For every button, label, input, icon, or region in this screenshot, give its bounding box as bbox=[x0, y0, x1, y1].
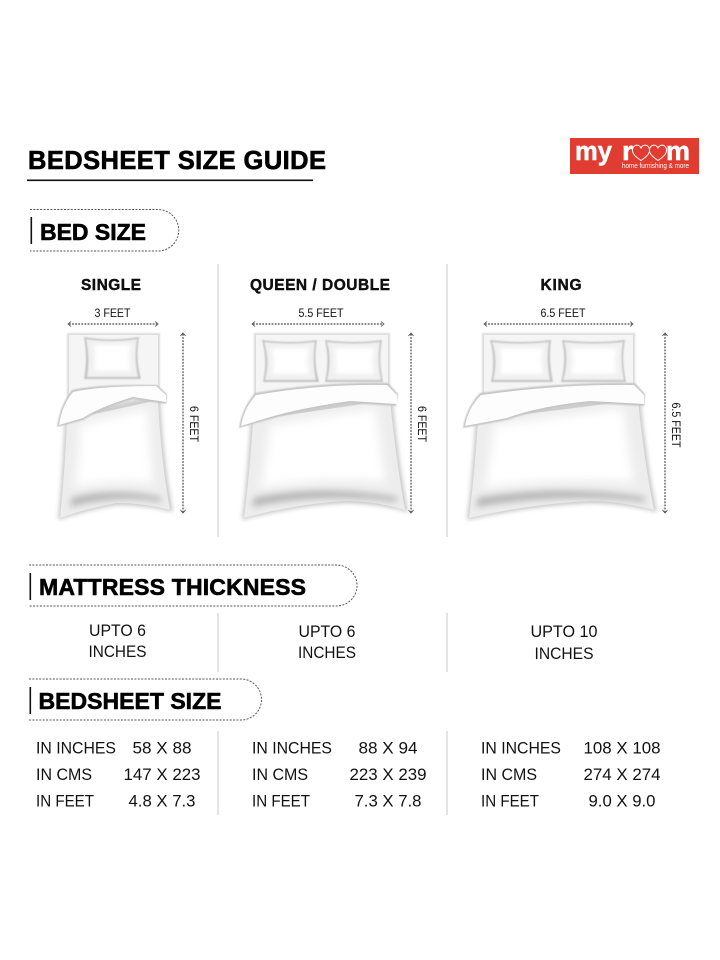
height dimension: 6.5 feet: 6.5 FEET bbox=[669, 402, 683, 448]
sizes: queen bbox=[252, 738, 426, 810]
bed: single bbox=[57, 333, 173, 520]
sizes: queen: 88 X 94 bbox=[358, 738, 418, 758]
sizes: queen: IN CMS bbox=[252, 765, 308, 784]
label: king: KING bbox=[540, 277, 582, 294]
sizes: king: IN INCHES bbox=[481, 738, 561, 758]
mattress: king: UPTO 10 bbox=[530, 622, 598, 641]
sizes: king: 274 X 274 bbox=[584, 765, 660, 784]
label: queen / double: QUEEN / DOUBLE bbox=[250, 277, 390, 294]
sizes: king: IN CMS bbox=[481, 765, 537, 784]
sizes: queen: IN INCHES bbox=[252, 738, 332, 758]
height dimension: 6 feet: 6 FEET bbox=[187, 406, 201, 443]
bed: king bbox=[463, 333, 657, 520]
width dimension: 5.5 feet: 5.5 FEET bbox=[298, 306, 344, 320]
sizes: single: 58 X 88 bbox=[132, 738, 192, 758]
height dimension: 6 feet queen: 6 FEET bbox=[415, 406, 429, 443]
sizes: single: IN CMS bbox=[36, 765, 92, 784]
column dividers: mattress bbox=[218, 613, 447, 672]
height dimension: 6 feet queen bbox=[408, 333, 429, 513]
width dimension: 6.5 feet: 6.5 FEET bbox=[540, 306, 586, 320]
heading: bedsheet size bbox=[29, 679, 262, 720]
sizes: queen: IN FEET bbox=[252, 792, 310, 810]
width dimension: 6.5 feet bbox=[484, 306, 633, 326]
height dimension: 6 feet bbox=[180, 333, 201, 513]
sizes: single: 4.8 X 7.3 bbox=[128, 792, 196, 810]
sizes: queen: 223 X 239 bbox=[350, 765, 426, 784]
label: single: SINGLE bbox=[81, 277, 141, 294]
logo: m bbox=[666, 136, 690, 166]
sizes: single bbox=[36, 738, 200, 810]
mattress: single: INCHES bbox=[88, 642, 146, 661]
heading: mattress thickness: MATTRESS THICKNESS bbox=[39, 574, 306, 600]
mattress: queen: UPTO 6 bbox=[298, 622, 356, 641]
sizes: queen: 7.3 X 7.8 bbox=[354, 792, 422, 810]
title: BEDSHEET SIZE GUIDE bbox=[28, 147, 326, 175]
heading: bed size bbox=[30, 210, 179, 251]
heading: mattress thickness bbox=[29, 565, 357, 606]
mattress: single bbox=[88, 621, 146, 661]
logo: r bbox=[622, 136, 634, 166]
logo bbox=[570, 136, 699, 174]
mattress: king bbox=[530, 622, 598, 663]
sizes: king bbox=[481, 738, 660, 810]
heading: bedsheet size: BEDSHEET SIZE bbox=[38, 688, 222, 714]
height dimension: 6.5 feet bbox=[662, 333, 683, 513]
width dimension: 3 feet bbox=[68, 306, 158, 326]
logo: my bbox=[575, 136, 612, 166]
sizes: king: 9.0 X 9.0 bbox=[588, 792, 656, 810]
heading: bed size: BED SIZE bbox=[40, 219, 146, 245]
sizes: single: 147 X 223 bbox=[124, 765, 200, 784]
sizes: king: 108 X 108 bbox=[584, 738, 660, 758]
mattress: king: INCHES bbox=[534, 644, 594, 663]
mattress: queen bbox=[298, 622, 356, 662]
mattress: queen: INCHES bbox=[298, 643, 356, 662]
bed: queen / double bbox=[239, 333, 408, 520]
column dividers: bed size bbox=[218, 264, 447, 537]
width dimension: 5.5 feet bbox=[252, 306, 384, 326]
sizes: king: IN FEET bbox=[481, 792, 539, 810]
mattress: single: UPTO 6 bbox=[89, 621, 146, 640]
logo: home furnishing & more bbox=[622, 163, 689, 170]
sizes: single: IN FEET bbox=[36, 792, 94, 810]
sizes: single: IN INCHES bbox=[36, 738, 116, 758]
width dimension: 3 feet: 3 FEET bbox=[94, 306, 131, 320]
column dividers: bedsheet bbox=[218, 731, 447, 815]
